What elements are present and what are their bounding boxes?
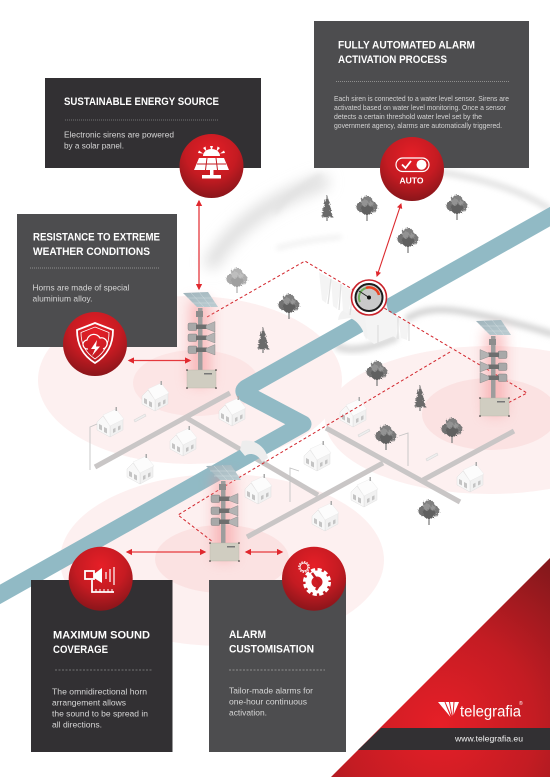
icon: horn and range — [69, 547, 133, 611]
siren: left — [183, 292, 218, 389]
body text: detects a certain threshold water level set by the — [334, 112, 482, 121]
panel: sustainable energy source — [45, 78, 261, 168]
heading: FULLY AUTOMATED ALARM — [338, 40, 475, 52]
sound coverage zones — [38, 296, 550, 646]
siren: bottom — [206, 465, 241, 562]
trees — [226, 195, 468, 525]
icon: solar panel — [180, 134, 244, 198]
body text: government agency, alarms are automatically triggered. — [334, 121, 502, 130]
body text: The omnidirectional horn — [52, 686, 147, 696]
body text: activation. — [229, 708, 267, 718]
logo mark — [438, 702, 459, 717]
icon: auto toggle — [380, 137, 444, 201]
houses — [97, 381, 484, 531]
heading: WEATHER CONDITIONS — [33, 246, 150, 258]
river — [0, 211, 550, 600]
heading: SUSTAINABLE ENERGY SOURCE — [64, 96, 219, 108]
heading: RESISTANCE TO EXTREME — [33, 232, 160, 244]
icon: gears and wrench — [282, 547, 346, 611]
benches and street lamps — [90, 414, 438, 502]
body text: Electronic sirens are powered — [64, 130, 174, 140]
icon: weather shield — [63, 312, 127, 376]
heading: COVERAGE — [53, 644, 108, 656]
terrain shadows — [212, 172, 550, 349]
body text: by a solar panel. — [64, 140, 124, 150]
body text: Horns are made of special — [32, 282, 130, 292]
logo registered mark: ® — [519, 700, 523, 707]
panel: resistance to extreme weather — [17, 214, 177, 347]
body text: Tailor-made alarms for — [229, 686, 313, 696]
siren: right — [476, 320, 511, 417]
body text: all directions. — [52, 720, 102, 730]
dam bridge — [319, 272, 409, 344]
body text: one-hour continuous — [229, 696, 307, 706]
small bridge — [240, 440, 268, 462]
footer band — [358, 728, 550, 750]
website: www.telegrafia.eu — [454, 734, 523, 744]
arrows — [127, 201, 401, 552]
heading: ALARM — [229, 629, 266, 641]
corner brand block — [331, 558, 550, 777]
roads — [95, 393, 514, 537]
panel: fully automated alarm activation — [314, 21, 529, 168]
panel: alarm customisation — [209, 580, 346, 752]
body text: activated based on water level monitoring. Once a sensor — [334, 103, 506, 112]
heading: CUSTOMISATION — [229, 644, 314, 656]
water level gauge — [352, 280, 386, 315]
body text: Each siren is connected to a water level sensor. Sirens are — [334, 94, 509, 103]
heading: MAXIMUM SOUND — [53, 630, 150, 642]
body text: aluminium alloy. — [32, 294, 92, 304]
logo wordmark: telegrafia — [460, 704, 521, 720]
body text: the sound to be spread in — [52, 708, 148, 718]
dashed network lines — [178, 261, 527, 542]
body text: arrangement allows — [52, 698, 126, 708]
panel: maximum sound coverage — [31, 580, 172, 752]
icon: auto toggle: AUTO — [400, 176, 424, 186]
heading: ACTIVATION PROCESS — [338, 54, 447, 66]
